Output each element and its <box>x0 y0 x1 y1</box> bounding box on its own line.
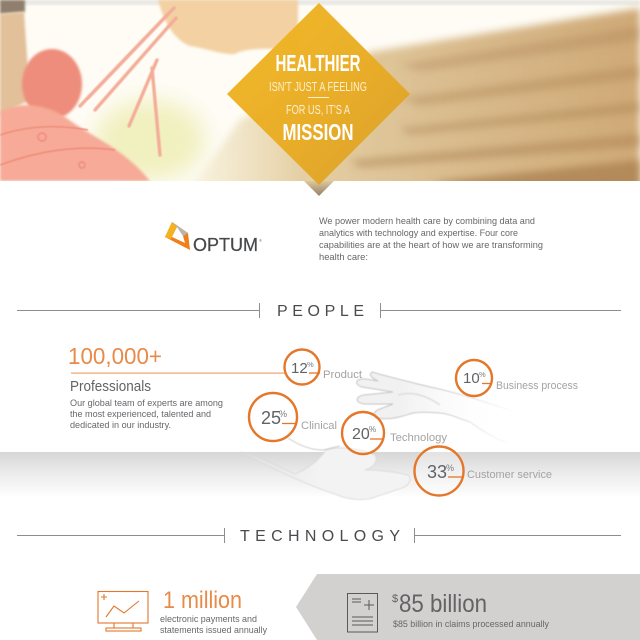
stat: professionals: 100,000+ <box>68 343 162 369</box>
callout: 20% technology: 20 <box>352 426 370 443</box>
stat: 1 million <box>160 587 267 636</box>
Optum logo <box>165 222 262 255</box>
stat: professionals: dedicated in our industry. <box>70 420 171 431</box>
shoe <box>0 49 150 181</box>
callout: 20% technology: Technology <box>390 432 448 444</box>
headline text <box>269 50 367 145</box>
hero photo: shoe and wooden boardwalk <box>0 0 640 190</box>
headline text: HEALTHIER <box>276 50 361 76</box>
callout: 25% clinical <box>249 393 337 441</box>
callout: 10% business process: % <box>479 370 486 379</box>
grey floor band <box>0 452 640 498</box>
callout: 10% business process: 10 <box>463 370 480 387</box>
icon: claims document <box>348 594 378 632</box>
intro paragraph: health care: <box>319 252 368 263</box>
stat: 1 million: electronic payments and <box>160 614 257 625</box>
panel: claims <box>296 574 640 640</box>
callout: 20% technology <box>342 412 448 454</box>
stat: 85 billion: $ <box>392 593 398 605</box>
headline text: MISSION <box>282 119 354 145</box>
stat: professionals: Professionals <box>70 378 151 395</box>
intro paragraph <box>319 216 543 263</box>
callout: 10% business process: Business process <box>496 380 578 392</box>
callout: 33% customer service: Customer service <box>467 469 552 481</box>
illustration: reaching hand <box>357 372 512 443</box>
stat: professionals <box>68 343 285 431</box>
intro paragraph: analytics with technology and expertise. Four core <box>319 228 518 239</box>
intro paragraph: We power modern health care by combining data and <box>319 216 535 227</box>
callout: 33% customer service: % <box>446 463 454 473</box>
stat: professionals: Our global team of experts are among <box>70 398 223 409</box>
callout: 12% product: % <box>307 360 314 369</box>
callout: 25% clinical: % <box>279 409 287 419</box>
icon: monitor with chart <box>98 592 148 631</box>
callout: 25% clinical: Clinical <box>301 420 337 432</box>
callout: 12% product: Product <box>323 369 362 381</box>
stat: 1 million: statements issued annually <box>160 625 267 636</box>
callout: 10% business process <box>456 360 578 396</box>
Optum logo: ® <box>259 238 262 243</box>
intro paragraph: capabilities are at the heart of how we are transforming <box>319 240 543 251</box>
section heading: technology: TECHNOLOGY <box>240 528 400 545</box>
callout: 20% technology: % <box>369 425 376 434</box>
stat: 85 billion: 85 billion <box>399 590 487 618</box>
Optum logo: OPTUM <box>193 235 258 255</box>
callout: 33% customer service: 33 <box>427 462 447 482</box>
stat: professionals: the most experienced, talented and <box>70 409 211 420</box>
callout: 25% clinical: 25 <box>261 408 281 428</box>
section heading: people: PEOPLE <box>277 303 364 320</box>
stat: 85 billion <box>392 590 549 629</box>
stat: 85 billion: $85 billion in claims processed annually <box>393 619 549 629</box>
stat: 1 million: 1 million <box>163 587 242 614</box>
hero diamond banner <box>227 3 410 196</box>
callout: 12% product <box>284 350 362 384</box>
callout: 12% product: 12 <box>291 360 308 377</box>
headline text: ISN'T JUST A FEELING <box>269 80 367 94</box>
headline text: FOR US, IT'S A <box>286 103 350 117</box>
illustration: open hand <box>240 438 410 500</box>
callout: 33% customer service <box>414 446 552 496</box>
